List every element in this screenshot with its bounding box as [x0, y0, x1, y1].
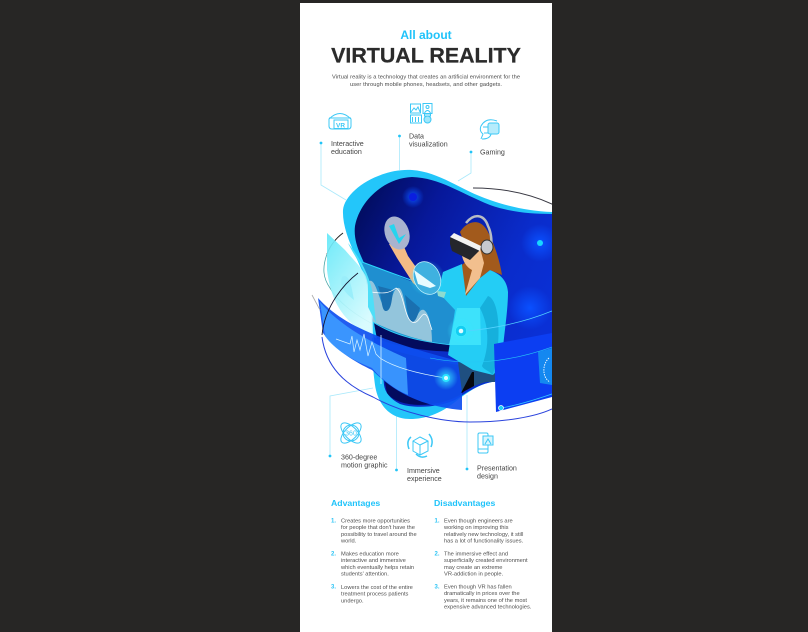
advantages list: interactive and immersive: [341, 558, 406, 564]
icon: VR headset: [329, 114, 351, 129]
label: 360-degree motion graphic: 360-degree: [341, 454, 377, 462]
intro text: [332, 74, 520, 88]
label: data visualization: Data: [409, 132, 424, 140]
connector lines: [321, 136, 471, 470]
blouse shade: [480, 296, 499, 375]
disadvantages list: The immersive effect and: [444, 551, 508, 557]
label: 360-degree motion graphic: motion graphic: [341, 462, 388, 470]
advantages list: 1.: [331, 518, 336, 524]
label: immersive experience: experience: [407, 475, 442, 483]
icon: presentation phone: [478, 433, 493, 453]
figure: trousers: [458, 362, 496, 393]
small right screen: [538, 348, 552, 385]
front blue orbit: [322, 337, 552, 422]
advantages list: which eventually helps retain: [340, 565, 414, 571]
disadvantages list: expensive advanced technologies.: [444, 604, 532, 610]
label: presentation design: design: [477, 472, 498, 480]
intro text: Virtual reality is a technology that creates an artificial environment for the: [332, 74, 520, 80]
heading: disadvantages: Disadvantages: [434, 498, 495, 508]
figure: raised arm: [389, 244, 416, 286]
chart area: [368, 281, 432, 342]
label: immersive experience: [407, 467, 442, 483]
figure: ear cup: [481, 240, 493, 254]
disadvantages list: 1.: [434, 518, 440, 524]
figure: VR visor: [450, 237, 480, 260]
icon: 360 graphic: [338, 420, 364, 446]
light cyan glass panel: [327, 233, 373, 338]
advantages list: for people that don't have the: [341, 525, 415, 531]
glow: top: [402, 187, 423, 207]
title: All about: [400, 28, 452, 42]
chart line: [372, 288, 432, 330]
chart valleys: [378, 286, 420, 322]
icon: 360 graphic: 360: [345, 430, 357, 438]
lower dark band: [374, 323, 466, 405]
disadvantages list: working on improving this: [443, 525, 509, 531]
node left: [434, 366, 458, 390]
label: presentation design: Presentation: [477, 464, 517, 472]
label: 360-degree motion graphic: [341, 454, 388, 470]
curved screen: chart: [362, 262, 455, 344]
label: interactive education: Interactive: [331, 140, 364, 148]
heading: advantages: Advantages: [331, 498, 380, 508]
advantages list: possibility to travel around the: [341, 532, 417, 538]
node center: [448, 322, 466, 337]
blouse highlight: [449, 308, 481, 345]
waveform line: [336, 334, 446, 378]
advantages list: treatment process patients: [341, 592, 409, 598]
figure: hair: [460, 222, 502, 296]
title: [331, 28, 521, 67]
disadvantages list: Even though engineers are: [444, 518, 513, 524]
icon: VR headset: VR: [336, 122, 345, 129]
advantages list: [331, 518, 417, 604]
advantages list: Creates more opportunities: [341, 518, 410, 524]
label: data visualization: visualization: [409, 140, 448, 148]
advantages list: undergo.: [341, 598, 364, 604]
panel: disadvantages: [434, 498, 532, 610]
advantages list: 3.: [331, 584, 336, 590]
holo disc: hand: [410, 261, 443, 295]
figure: headset strap: [466, 216, 491, 246]
label: gaming: Gaming: [480, 148, 505, 156]
disadvantages list: may create an extreme: [444, 565, 502, 571]
disadvantages list: superficially created environment: [444, 558, 528, 564]
disadvantages list: dramatically in prices over the: [444, 591, 520, 597]
advantages list: world.: [340, 538, 357, 544]
disadvantages list: 3.: [434, 584, 440, 590]
blob inner deep blue: [355, 177, 552, 407]
advantages list: 2.: [331, 552, 336, 558]
label: data visualization: [409, 132, 448, 148]
label: immersive experience: Immersive: [407, 467, 440, 475]
icon: data visualization: [410, 104, 432, 123]
cyan band over glass: [348, 243, 376, 323]
forearm: [437, 291, 446, 298]
orbit ring: black left top: [327, 233, 343, 254]
advantages list: students' attention.: [341, 572, 389, 578]
blob outer cyan: [343, 170, 552, 419]
label: interactive education: education: [331, 148, 362, 156]
panel line: [501, 394, 552, 408]
blue band with waveform: [318, 298, 462, 410]
disadvantages list: years, it remains one of the most: [444, 598, 527, 604]
label: interactive education: [331, 140, 364, 156]
main illustration: [312, 170, 560, 422]
node bottom right: [498, 406, 504, 410]
label: presentation design: [477, 464, 517, 480]
intro text: user through mobile phones, headsets, and other gadgets.: [350, 82, 502, 88]
orbit ring: dark back: [473, 188, 552, 205]
grey stub line: [312, 295, 320, 310]
orbit ring: teal left arc: [324, 254, 372, 324]
disadvantages list: has a lot of functionality issues.: [444, 538, 524, 544]
advantages list: Lowers the cost of the entire: [341, 585, 413, 591]
disadvantages list: 2.: [434, 552, 440, 558]
figure: face and neck: [462, 248, 484, 295]
title: VIRTUAL REALITY: [331, 43, 521, 67]
connector dots: [320, 135, 472, 471]
black left arc: [322, 273, 358, 335]
icon: gaming headset: [480, 120, 499, 139]
disadvantages list: [434, 518, 532, 610]
chart bubble: [341, 276, 354, 300]
holo disc: check mark: [384, 216, 410, 250]
glow: lower right: [512, 290, 548, 326]
icon: immersive cube: [408, 434, 432, 457]
disadvantages list: Even though VR has fallen: [444, 584, 512, 590]
right blue panel: [494, 333, 552, 412]
disadvantages list: relatively new technology, it still: [444, 532, 523, 538]
glow: right: [524, 227, 552, 258]
panel: advantages: [331, 498, 417, 604]
figure: blouse: [438, 264, 508, 375]
white page panel: [300, 3, 552, 632]
disadvantages list: VR-addiction in people.: [444, 572, 504, 578]
advantages list: Makes education more: [341, 551, 399, 557]
